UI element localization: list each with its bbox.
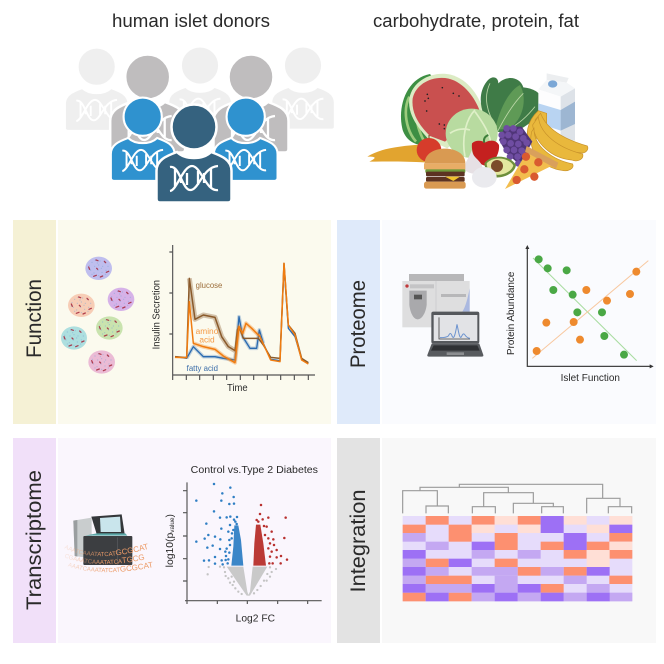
icon: milk carton — [538, 73, 575, 141]
icon: parsnips — [367, 144, 425, 162]
chart: insulin secretion trace — [152, 245, 315, 394]
icon: egg — [472, 167, 497, 188]
illustration: assorted foods — [367, 73, 588, 189]
panel strip: function — [13, 220, 56, 424]
points: downregulated — [196, 484, 243, 566]
series: glucose — [175, 263, 308, 363]
chart: heatmap — [403, 516, 632, 601]
points: orange — [537, 272, 636, 351]
axis label: log10(p value): log10(p — [165, 533, 176, 567]
label: Proteome: Proteome — [346, 280, 370, 368]
axis label: Protein Abundance: Protein Abundance — [506, 271, 517, 355]
chart: volcano plot — [165, 465, 322, 625]
title: human islet donors: human islet donors — [112, 10, 270, 31]
icon: grapes — [499, 127, 532, 165]
label: Function: Function — [22, 279, 46, 358]
label: amino acid: acid — [199, 335, 215, 345]
label: amino acid: amino — [196, 326, 219, 336]
icon: avocado — [484, 157, 516, 177]
points: not significant — [208, 567, 276, 596]
label: Integration: Integration — [346, 490, 370, 592]
panel: proteome — [337, 220, 656, 424]
heading: Control vs. Type 2 Diabetes: Control vs.Type 2 Diabetes — [191, 465, 318, 476]
icon: bananas — [527, 111, 588, 171]
text: DNA sequence reads — [64, 544, 152, 572]
axis label: log10(p value): ) — [165, 514, 176, 517]
icon: sequencer — [73, 514, 132, 565]
points: green — [539, 259, 624, 355]
icon: leafy greens — [481, 77, 541, 133]
icon: mass spectrometer — [402, 274, 470, 327]
panel strip: proteome — [337, 220, 380, 424]
points: upregulated — [253, 505, 287, 566]
icon: burger — [424, 149, 466, 189]
icon: bell pepper — [472, 135, 499, 166]
text: DNA sequence reads: CGAAATCAAATATCATGCG — [65, 554, 144, 564]
panel: transcriptome — [13, 438, 331, 643]
label: fatty acid: fatty acid — [187, 363, 218, 373]
icon: watermelon — [401, 74, 484, 148]
chart: protein abundance vs islet function scatter — [506, 245, 654, 384]
icon: cabbage — [446, 109, 498, 158]
title: carbohydrate, protein, fat: carbohydrate, protein, fat — [373, 10, 579, 31]
panel strip: transcriptome — [13, 438, 56, 643]
axis label: Islet Function: Islet Function — [561, 373, 620, 384]
axis label: log10(p value): value — [169, 517, 176, 533]
icon: group of human donors with DNA — [65, 46, 335, 202]
panel strip: integration — [337, 438, 380, 643]
text: DNA sequence reads: AAATCAAATATCATGCGCAT — [68, 562, 152, 572]
series: amino acid — [175, 263, 308, 364]
panel: function — [13, 220, 331, 424]
icon: pizza slice — [505, 146, 558, 189]
icon: laptop with spectrum — [427, 312, 483, 357]
axis label: Insulin Secretion: Insulin Secretion — [152, 280, 163, 349]
icon: garlic — [465, 150, 483, 174]
series: fatty acid — [175, 267, 308, 363]
axis label: Log2 FC: Log2 FC — [236, 614, 275, 625]
label: glucose: glucose — [196, 280, 223, 290]
panel: integration — [337, 438, 656, 643]
label: Transcriptome: Transcriptome — [22, 470, 46, 610]
axis label: Time: Time — [227, 383, 248, 394]
icon: apple — [417, 135, 441, 162]
text: DNA sequence reads: AAATCAAATATCATGCGCAT — [64, 544, 148, 556]
icon: islets — [61, 257, 134, 374]
chart: dendrogram — [403, 484, 632, 513]
